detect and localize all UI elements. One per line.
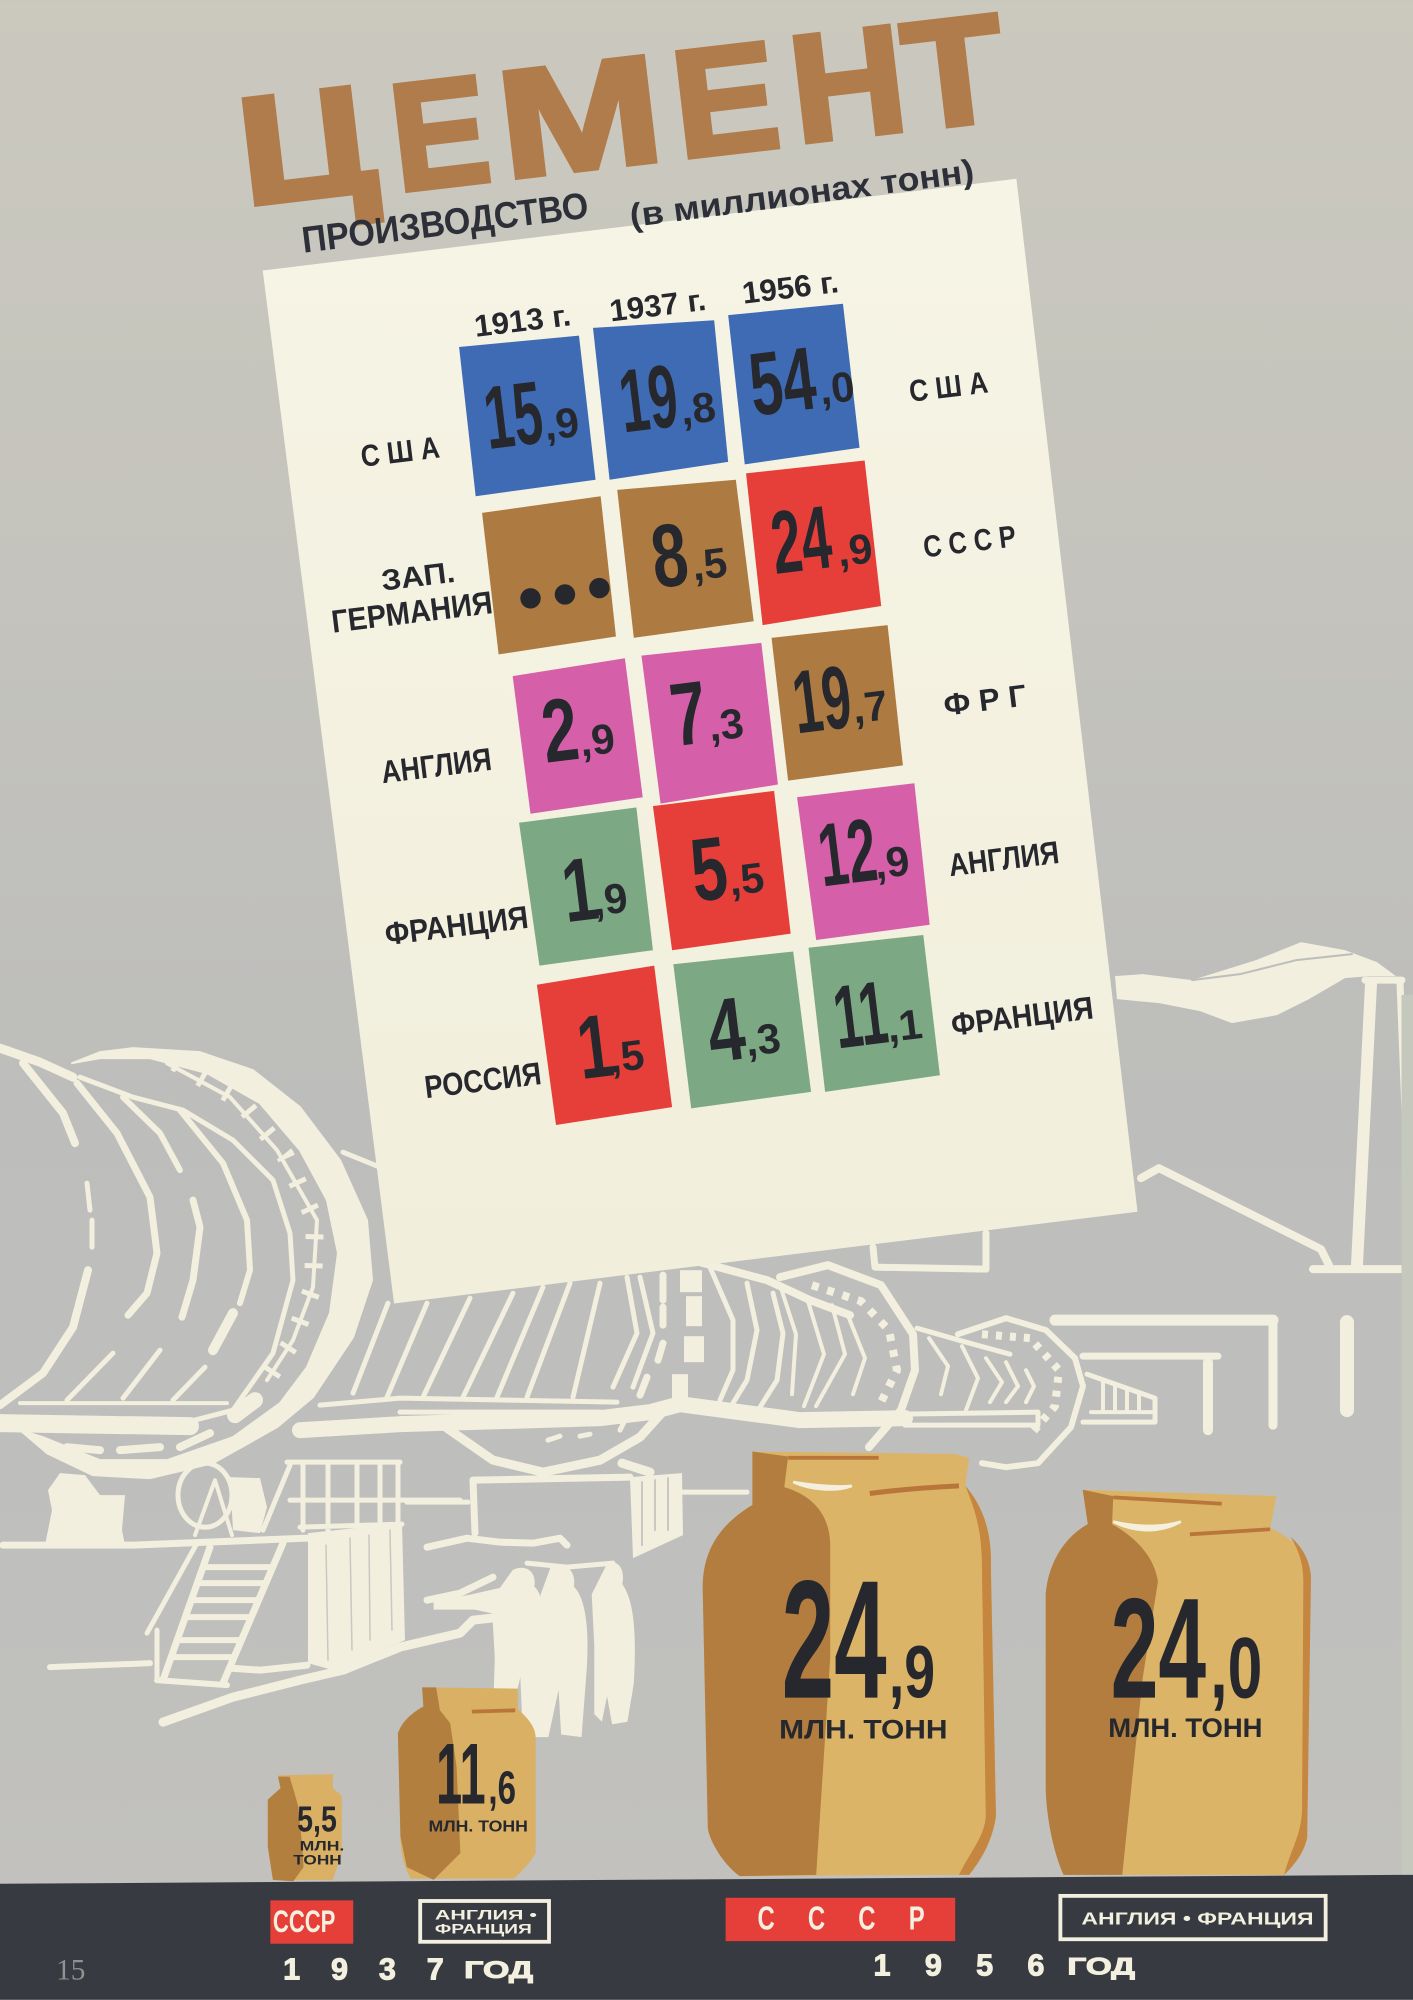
cell USA 1937 <box>593 320 728 480</box>
cell England 1937 <box>641 643 778 804</box>
cell USA 1937: ,8 <box>678 383 718 434</box>
England right: АНГЛИЯ <box>947 834 1061 883</box>
West Germany: ЗАП. <box>379 556 457 598</box>
kiln small ring and tube <box>780 1265 1155 1467</box>
bag: USSR 1937 <box>268 1774 344 1881</box>
legend: England-France 1956 <box>1060 1896 1326 1939</box>
table of production cells <box>459 304 940 1125</box>
cell USA 1913: 15 <box>479 363 548 469</box>
legend: USSR 1937: СССР <box>273 1903 335 1939</box>
cell England 1913 <box>513 658 643 814</box>
title: Е <box>382 43 498 224</box>
cell FRG 1956: ,7 <box>850 681 890 732</box>
large kiln tube arcs <box>0 1048 380 1450</box>
France right: ФРАНЦИЯ <box>949 990 1095 1043</box>
legend: England-France 1956: АНГЛИЯ • ФРАНЦИЯ <box>1081 1909 1314 1929</box>
West Germany line 2: ГЕРМАНИЯ <box>329 584 494 640</box>
bag: USSR 1956 <box>703 1451 996 1876</box>
FRG right: Ф Р Г <box>942 679 1028 723</box>
white data sheet <box>263 179 1138 1304</box>
year 1937 caption: 1937 <box>283 1952 444 1986</box>
title <box>229 0 1013 238</box>
bag: England and France 1956: МЛН. ТОНН <box>1108 1713 1263 1743</box>
cell FRG 1956 <box>772 625 903 781</box>
cell France 1956: 11 <box>828 964 893 1068</box>
bag: England and France 1956 <box>1046 1490 1311 1875</box>
cell France 1937: 4 <box>702 978 751 1082</box>
cell USA 1956: 54 <box>744 329 821 436</box>
USSR right: С С С Р <box>921 519 1018 564</box>
legend: USSR 1956 <box>726 1898 955 1941</box>
bag: USSR 1956: 24 <box>782 1546 887 1733</box>
large kiln ring <box>20 1048 372 1478</box>
page number: 15 <box>56 1954 85 1986</box>
right country labels <box>907 365 1095 1043</box>
bag: England and France 1937: МЛН. ТОНН <box>428 1818 528 1835</box>
cell USSR 1956: 24 <box>765 486 837 593</box>
year 1956 caption <box>874 1949 1135 1983</box>
cell France 1937 <box>673 952 811 1108</box>
bag: USSR 1937: 5,5 <box>297 1799 337 1839</box>
kiln ring blocks <box>672 1270 704 1400</box>
cell USSR 1956: ,9 <box>834 524 875 575</box>
year 1937 caption: ГОД <box>464 1957 533 1984</box>
kiln middle tube with ribs <box>300 1262 905 1472</box>
subtitle: production: ПРОИЗВОДСТВО <box>299 185 591 261</box>
subtitle: in million tons: (в миллионах тонн) <box>627 153 976 235</box>
left country labels <box>329 431 543 1105</box>
legend: England-France 1937 <box>420 1901 549 1942</box>
cell USA 1956: ,0 <box>817 362 857 413</box>
cell USA 1937: 19 <box>614 347 683 452</box>
year 1937 caption <box>283 1952 533 1986</box>
cell West Germany 1937: ,5 <box>689 538 730 589</box>
year 1956: 1956 г. <box>740 265 841 311</box>
cell USA 1913: ,9 <box>541 398 582 449</box>
bag: England and France 1956: ,0 <box>1210 1621 1262 1717</box>
cell Russia 1937 <box>653 791 791 950</box>
bag: USSR 1937: МЛН. <box>300 1838 344 1854</box>
chimney and factory buildings <box>873 980 1413 1430</box>
year 1937: 1937 г. <box>608 283 708 329</box>
bag: England and France 1956: 24 <box>1111 1568 1206 1728</box>
cell England 1956: 12 <box>813 801 882 906</box>
title: Ц <box>229 53 383 238</box>
USA left: С Ш А <box>359 431 442 474</box>
cell England 1937: 7 <box>665 663 712 766</box>
cell Russia 1937: ,5 <box>726 853 767 904</box>
bag: England and France 1937: 11 <box>436 1725 486 1822</box>
column years <box>472 265 841 344</box>
USA right: С Ш А <box>907 365 990 409</box>
legend: USSR 1956: СССР <box>758 1901 925 1938</box>
cell USA 1913 <box>459 336 596 496</box>
cell England 1956 <box>797 783 930 940</box>
cell France 1913: ,9 <box>590 874 630 925</box>
year 1956 caption: 1956 <box>874 1949 1044 1983</box>
cell FRG 1956: 19 <box>787 648 857 753</box>
cell USA 1956 <box>728 304 860 464</box>
cell Russia 1913: 1 <box>572 995 618 1099</box>
cell England 1956: ,9 <box>871 837 912 888</box>
dark ground band <box>0 1875 1413 2000</box>
workers silhouettes <box>434 1563 635 1738</box>
cell France 1956: ,1 <box>884 1000 925 1051</box>
year 1913: 1913 г. <box>472 298 573 344</box>
cell Russia 1937: 5 <box>685 819 733 921</box>
platform, machinery and staircase <box>3 1462 747 1722</box>
cell England 1913: 2 <box>536 680 584 782</box>
subtitle <box>299 153 976 261</box>
bag: USSR 1956: ,9 <box>889 1631 935 1713</box>
legend: England-France 1937: ФРАНЦИЯ <box>435 1921 532 1936</box>
cell Russia 1913 <box>537 966 672 1125</box>
cell West Germany 1937 <box>617 480 754 638</box>
cell England 1913: ,9 <box>577 714 617 765</box>
cell Russia 1913: ,5 <box>606 1031 647 1082</box>
cell West Germany 1913 <box>482 496 616 654</box>
cell West Germany 1937: 8 <box>646 505 693 607</box>
bag: England and France 1937: ,6 <box>488 1763 516 1814</box>
bag: USSR 1956: МЛН. ТОНН <box>779 1714 948 1744</box>
chimney smoke <box>1115 942 1396 1023</box>
illustration: cement kiln and factory <box>0 942 1413 1738</box>
bag: England and France 1937 <box>398 1687 536 1880</box>
title: М <box>489 23 671 212</box>
cell England 1937: ,3 <box>706 699 746 750</box>
bag: USSR 1937: ТОНН <box>293 1852 342 1868</box>
Russia: РОССИЯ <box>422 1055 543 1105</box>
cell USSR 1956 <box>746 461 881 625</box>
France left: ФРАНЦИЯ <box>383 899 530 952</box>
year 1956 caption: ГОД <box>1067 1953 1135 1980</box>
title: Е <box>664 9 787 191</box>
cell France 1956 <box>809 935 940 1092</box>
cell France 1913: 1 <box>556 839 603 942</box>
right edge strip <box>1402 995 1413 1875</box>
cell France 1913 <box>519 807 653 966</box>
England left: АНГЛИЯ <box>379 741 494 790</box>
cell France 1937: ,3 <box>743 1014 783 1065</box>
legend: England-France 1937: АНГЛИЯ • <box>435 1907 537 1922</box>
